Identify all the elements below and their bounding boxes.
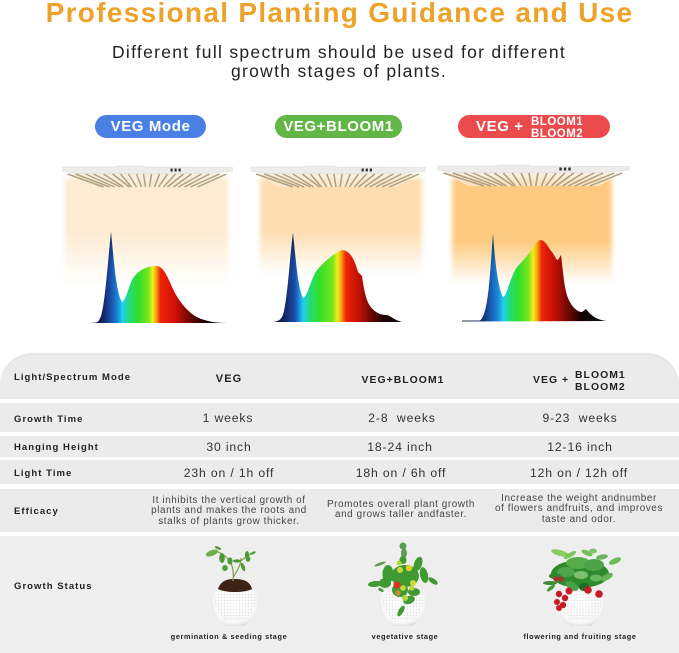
value: taste and odor. bbox=[542, 514, 616, 525]
value: 18h on / 6h off bbox=[356, 466, 446, 480]
plant 2: vegetative with tomatoes bbox=[368, 542, 439, 626]
value bbox=[151, 495, 307, 527]
row label: Light Time bbox=[14, 468, 72, 479]
table row: light time bbox=[0, 460, 679, 484]
value bbox=[495, 493, 663, 525]
table row: growth status bbox=[0, 536, 679, 653]
caption: germination & seeding stage bbox=[171, 632, 287, 641]
value: 9-23 weeks bbox=[542, 411, 618, 425]
value: Promotes overall plant growth bbox=[327, 499, 475, 510]
value: 2-8 weeks bbox=[368, 411, 436, 425]
subtitle bbox=[112, 42, 566, 81]
plant 1: seedling bbox=[205, 545, 257, 626]
table row: hanging height bbox=[0, 436, 679, 457]
value: stalks of plants grow thicker. bbox=[158, 516, 300, 527]
caption: flowering and fruiting stage bbox=[523, 632, 637, 641]
value: It inhibits the vertical growth of bbox=[152, 495, 306, 506]
spectrum chart 3 bbox=[462, 234, 607, 322]
table row: mode header bbox=[0, 355, 679, 399]
plant 3: flowering and fruiting bbox=[543, 548, 622, 626]
value: plants and makes the roots and bbox=[151, 505, 307, 516]
BLOOM1 BLOOM2: BLOOM1 bbox=[575, 370, 626, 381]
subtitle: growth stages of plants. bbox=[231, 61, 447, 81]
value: 23h on / 1h off bbox=[184, 466, 274, 480]
VEG: VEG bbox=[216, 373, 242, 385]
pill: VEG + BLOOM1 BLOOM2: BLOOM1 bbox=[531, 116, 583, 128]
pill: VEG+BLOOM1 bbox=[275, 115, 402, 138]
value: 12-16 inch bbox=[547, 440, 613, 454]
pill: VEG + BLOOM1 BLOOM2: VEG + bbox=[476, 118, 524, 135]
lamp 2 bbox=[251, 166, 425, 187]
glow: VEG+BLOOM1 bbox=[260, 178, 422, 275]
row label: Growth Status bbox=[14, 581, 93, 592]
VEG + BLOOM1 BLOOM2: VEG + bbox=[533, 375, 569, 386]
glow: VEG+BLOOM1+BLOOM2 bbox=[452, 178, 612, 284]
spectrum chart 1 bbox=[90, 232, 228, 323]
caption: vegetative stage bbox=[372, 632, 438, 641]
BLOOM1 BLOOM2: BLOOM2 bbox=[575, 382, 626, 393]
table row: efficacy bbox=[0, 489, 679, 532]
value: 18-24 inch bbox=[367, 440, 433, 454]
row label: Growth Time bbox=[14, 414, 83, 425]
subtitle: Different full spectrum should be used for different bbox=[112, 42, 566, 62]
value: Increase the weight andnumber bbox=[501, 493, 657, 504]
lamp 1 bbox=[62, 166, 232, 187]
pill: VEG + BLOOM1 BLOOM2 bbox=[458, 115, 610, 138]
spectrum chart 2 bbox=[273, 233, 402, 322]
row label: Hanging Height bbox=[14, 442, 99, 453]
pill: VEG Mode bbox=[95, 115, 206, 138]
value: 1 weeks bbox=[203, 411, 253, 425]
glow: VEG bbox=[65, 178, 228, 286]
pill: VEG Mode: VEG Mode bbox=[111, 118, 190, 135]
lamp 3 bbox=[438, 165, 629, 186]
value bbox=[327, 499, 475, 520]
VEG+BLOOM1: VEG+BLOOM1 bbox=[362, 375, 444, 386]
pill: VEG+BLOOM1: VEG+BLOOM1 bbox=[283, 118, 394, 135]
table row: growth time bbox=[0, 403, 679, 432]
value: of flowers andfruits, and improves bbox=[495, 503, 663, 514]
lamps, glows and spectra bbox=[62, 164, 630, 323]
row label: Light/Spectrum Mode bbox=[14, 372, 131, 383]
BLOOM1 BLOOM2 bbox=[575, 370, 626, 393]
pill: VEG + BLOOM1 BLOOM2: BLOOM2 bbox=[531, 128, 583, 140]
value: 30 inch bbox=[206, 440, 252, 454]
value: and grows taller andfaster. bbox=[335, 509, 467, 520]
value: 12h on / 12h off bbox=[530, 466, 628, 480]
row label: Efficacy bbox=[14, 506, 59, 517]
